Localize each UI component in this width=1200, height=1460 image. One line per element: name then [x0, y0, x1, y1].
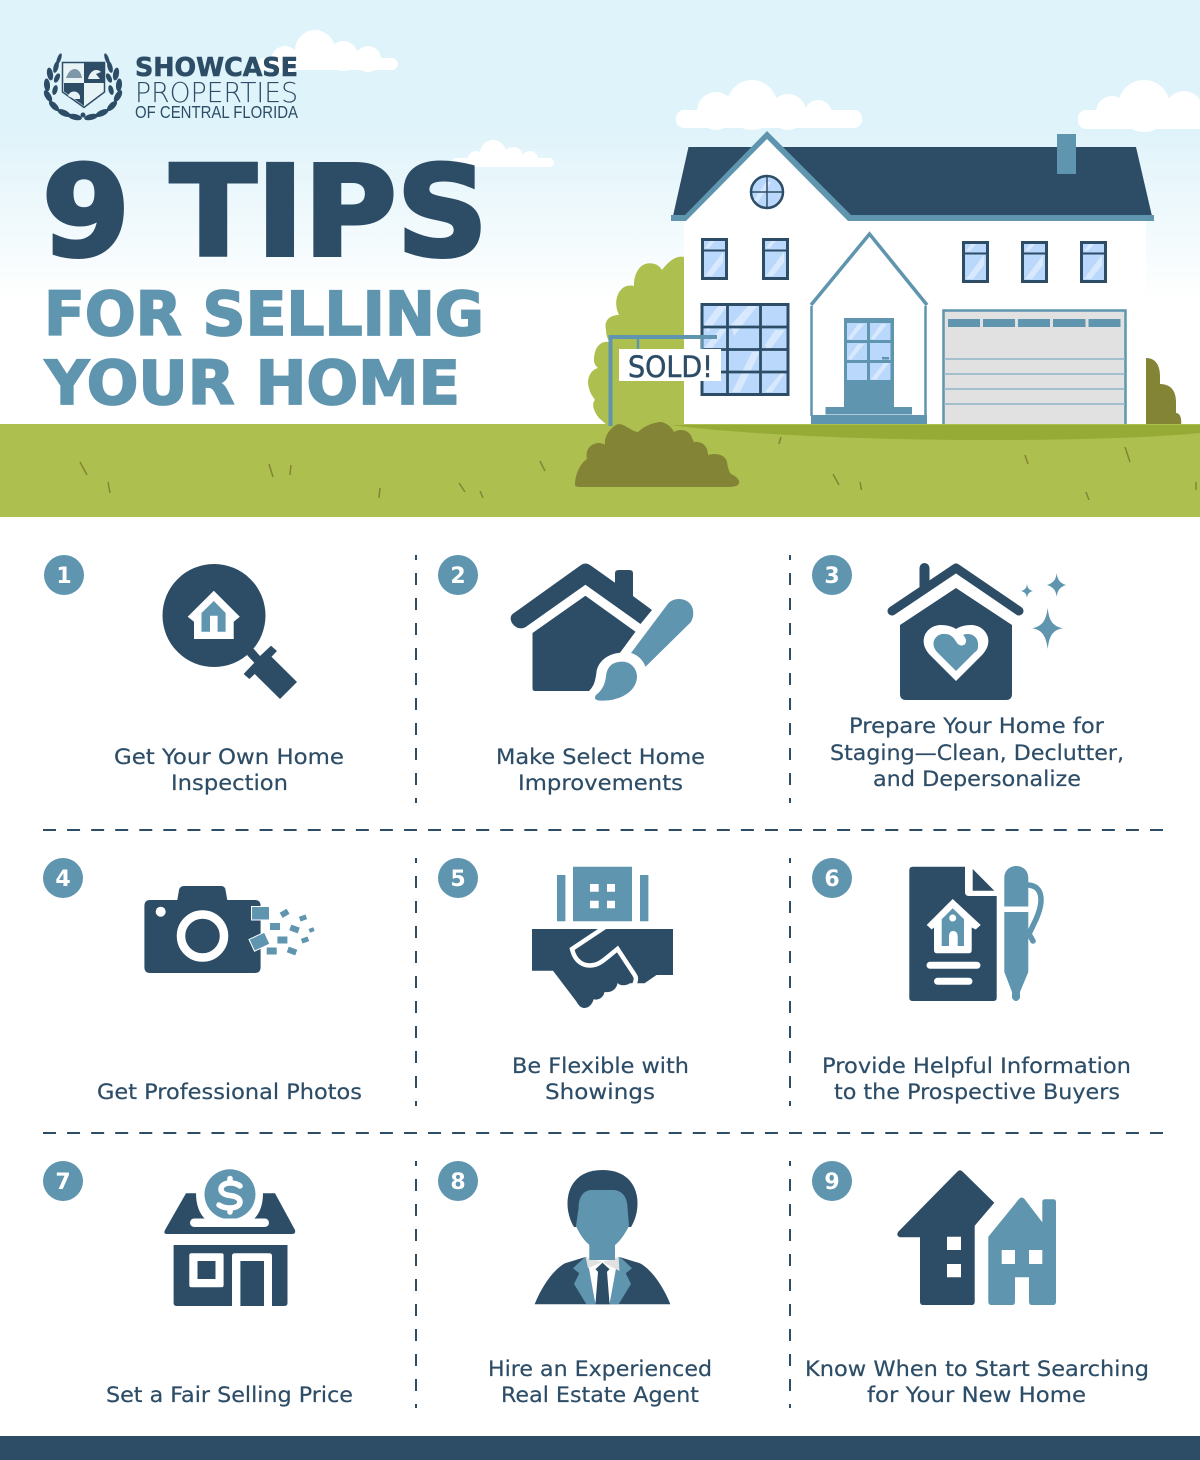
front door: [844, 318, 894, 408]
number badge 1: [44, 555, 84, 595]
tip 1: get your own home inspection: [44, 555, 344, 796]
logo: [42, 53, 298, 122]
caption 5: Be Flexible with: [512, 1054, 689, 1079]
bush right of house: [1146, 358, 1181, 426]
caption 3: and Depersonalize: [873, 767, 1081, 792]
round attic window: [751, 176, 783, 208]
number badge 7: 7: [55, 1170, 71, 1195]
caption 7: Set a Fair Selling Price: [106, 1383, 353, 1408]
logo wordmark: OF CENTRAL FLORIDA: [135, 102, 298, 122]
caption 9: for Your New Home: [867, 1383, 1086, 1408]
tip 8: hire an experienced agent: [438, 1161, 712, 1408]
tip 9: know when to start searching: [805, 1161, 1149, 1408]
grid dividers: [43, 555, 1163, 1408]
subtitle: for selling your home: YOUR HOME: [44, 348, 460, 419]
caption 6: Provide Helpful Information: [822, 1054, 1131, 1079]
cloud: above house: [676, 80, 862, 130]
caption 1: [114, 745, 344, 796]
caption 5: Showings: [545, 1080, 655, 1105]
cloud: beside title: [452, 140, 554, 167]
logo shield: [62, 62, 104, 108]
number badge 4: [43, 858, 83, 898]
front shrub: [575, 422, 739, 487]
roof: [673, 147, 1152, 216]
caption 8: Real Estate Agent: [501, 1383, 699, 1408]
number badge 2: 2: [450, 564, 466, 589]
number badge 6: 6: [824, 867, 840, 892]
footer bar: [0, 1436, 1200, 1460]
tip 5: be flexible with showings: [438, 858, 689, 1105]
icon: two houses: [897, 1170, 1056, 1305]
icon: clean house with heart and sparkles: [892, 568, 1066, 700]
icon: magnifying glass with house: [162, 564, 297, 699]
caption 2: [496, 745, 705, 796]
caption 5: [512, 1054, 689, 1105]
number badge 8: [438, 1161, 478, 1201]
house shadow on lawn: [670, 425, 1200, 440]
porch gable: [811, 234, 927, 305]
sold sign: [610, 337, 721, 426]
number badge 6: [812, 858, 852, 898]
caption 9: [805, 1357, 1149, 1408]
logo wordmark: SHOWCASE: [135, 53, 298, 83]
upper window 1: [702, 240, 726, 278]
number badge 5: [438, 858, 478, 898]
number badge 4: 4: [55, 867, 71, 892]
upper window 4: [1022, 242, 1046, 282]
caption 9: Know When to Start Searching: [805, 1357, 1149, 1382]
tip 3: prepare your home for staging: [812, 555, 1124, 792]
caption 4: Get Professional Photos: [97, 1080, 362, 1105]
lawn: [0, 424, 1200, 517]
cloud: top left: [258, 30, 398, 74]
upper window 3: [964, 242, 988, 282]
icon: handshake with building: [532, 867, 673, 1008]
icon: camera with pixels: [144, 886, 315, 973]
title: 9 TIPS: 9: [42, 140, 130, 285]
caption 6: to the Prospective Buyers: [834, 1080, 1120, 1105]
house: [671, 131, 1154, 426]
grass ticks: [80, 437, 1196, 500]
upper window 2: [764, 240, 788, 278]
sky background: [0, 0, 1200, 430]
garage door: [944, 310, 1126, 426]
upper window 5: [1082, 242, 1106, 282]
number badge 3: [812, 555, 852, 595]
logo wordmark: PROPERTIES: [135, 76, 298, 109]
bush behind house: [588, 257, 684, 426]
porch posts: [812, 306, 926, 416]
number badge 2: [438, 555, 478, 595]
sign hangers: [638, 339, 702, 350]
number badge 9: [812, 1161, 852, 1201]
tip 6: provide helpful information: [812, 858, 1131, 1105]
caption 1: Inspection: [171, 771, 288, 796]
logo laurel wreath: [42, 53, 124, 121]
icon: real estate agent: [535, 1170, 670, 1304]
number badge 5: 5: [450, 867, 466, 892]
caption 3: [830, 714, 1124, 792]
sign board: SOLD!: [628, 350, 713, 384]
caption 8: [488, 1357, 712, 1408]
large window: [702, 304, 788, 394]
icon: house with paintbrush: [511, 564, 693, 701]
tip 7: set a fair selling price: [43, 1161, 353, 1408]
sign post and arm: [610, 337, 717, 426]
caption 2: Make Select Home: [496, 745, 705, 770]
subtitle: for selling your home: [44, 279, 484, 419]
number badge 9: 9: [824, 1170, 840, 1195]
caption 3: Staging—Clean, Declutter,: [830, 741, 1124, 766]
porch base and step: [811, 407, 927, 425]
number badge 8: 8: [450, 1170, 466, 1195]
title: 9 TIPS: TIPS: [170, 140, 488, 285]
number badge 3: 3: [824, 564, 840, 589]
cloud: top right: [1078, 80, 1200, 132]
number badge 1: 1: [56, 564, 72, 589]
caption 2: Improvements: [518, 771, 683, 796]
caption 1: Get Your Own Home: [114, 745, 344, 770]
chimney: [1057, 134, 1076, 174]
number badge 7: [43, 1161, 83, 1201]
subtitle: for selling your home: FOR SELLING: [44, 279, 484, 350]
icon: storefront with dollar coin: [164, 1169, 295, 1306]
caption 8: Hire an Experienced: [488, 1357, 712, 1382]
house wall: [684, 134, 1146, 426]
eaves and gable trim: [671, 131, 1154, 221]
tip 2: make select home improvements: [438, 555, 705, 796]
logo wordmark: [135, 53, 298, 122]
caption 6: [822, 1054, 1131, 1105]
tip 4: get professional photos: [43, 858, 362, 1105]
icon: document and pen: [909, 866, 1041, 1001]
caption 3: Prepare Your Home for: [849, 714, 1104, 739]
